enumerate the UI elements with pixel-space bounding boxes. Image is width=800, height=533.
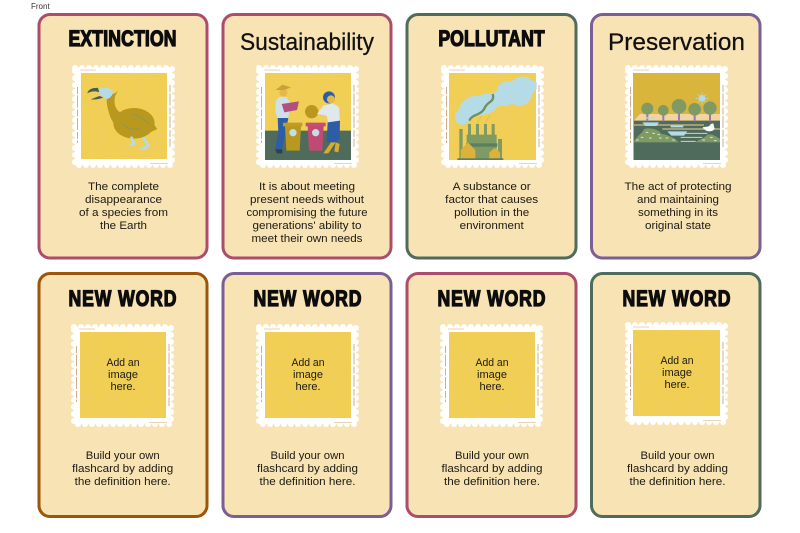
trees [641,99,717,121]
person right [305,91,340,153]
definition: flashcard by adding [442,463,542,475]
image placeholder: image [108,369,138,381]
image placeholder: Add an [476,357,508,369]
definition: Sustainability: generations' ability to [252,220,362,232]
heading: Preservation: Preservation [608,29,745,56]
label: Front: Front [31,2,50,11]
image placeholder: image [662,367,692,379]
image placeholder: here. [664,379,690,391]
image: factory stamp [444,68,541,165]
heading: Pollutant: POLLUTANT [438,27,545,52]
card: New word 2 [223,274,391,516]
definition: Sustainability: It is about meeting [259,181,355,193]
person left [275,85,299,153]
definition: flashcard by adding [627,463,728,475]
heading: New word: NEW WORD [622,287,731,312]
definition: Build your own [455,450,529,462]
definition: Pollutant: environment [460,220,525,232]
definition: Extinction: The complete [88,181,159,193]
definition [72,450,173,488]
image placeholder: here. [110,381,136,393]
image placeholder: Add an [292,357,324,369]
boats [642,117,687,136]
definition [257,450,358,488]
definition: the definition here. [444,476,540,488]
card: New word 3 [407,274,576,516]
heading: Extinction: EXTINCTION [68,27,177,52]
image placeholder [259,327,356,424]
image placeholder [74,327,171,424]
image placeholder: here. [296,381,320,393]
image placeholder: here. [480,381,504,393]
card: Preservation [592,14,760,258]
definition: Extinction [79,181,168,232]
image placeholder: Add an [660,355,694,367]
image placeholder [628,325,725,422]
definition: Pollutant: A substance or [453,181,531,193]
heading: Sustainability: Sustainability [240,29,374,56]
definition: Preservation: and maintaining [637,194,719,206]
heading: New word: NEW WORD [68,287,177,312]
definition: the definition here. [630,476,726,488]
definition: Sustainability: present needs without [250,194,365,206]
heading: New word: NEW WORD [437,287,546,312]
factory [459,124,502,159]
image: lake stamp [628,68,725,165]
sun [696,92,708,105]
definition: Preservation [624,181,732,232]
definition [627,450,728,488]
definition: Extinction: disappearance [85,194,162,206]
definition [442,450,542,488]
definition: Build your own [86,450,160,462]
definition: Extinction: of a species from [79,207,168,219]
bushes [634,128,720,142]
definition: Preservation: The act of protecting [624,181,732,193]
definition: the definition here. [260,476,356,488]
definition: Preservation: something in its [638,207,718,219]
card: Sustainability [223,14,391,258]
definition: Pollutant: pollution in the [454,207,529,219]
definition: Sustainability: compromising the future [246,207,368,219]
definition: flashcard by adding [257,463,358,475]
definition: Extinction: the Earth [100,220,147,232]
image: dodo stamp [75,68,172,165]
image placeholder: Add an [106,357,140,369]
definition: Build your own [640,450,714,462]
card: New word 4 [592,274,760,516]
definition: Sustainability [246,181,368,245]
image placeholder: image [477,369,507,381]
card: Pollutant [407,14,576,258]
bin pink [306,123,326,151]
definition: the definition here. [75,476,171,488]
image: recycling stamp [259,68,356,165]
definition: Pollutant: factor that causes [445,194,538,206]
definition: Preservation: original state [645,220,711,232]
card: New word 1 [39,274,207,516]
image placeholder [443,327,540,424]
heading: New word: NEW WORD [253,287,362,312]
bin olive [283,123,302,151]
smoke cloud [455,77,537,125]
duck [703,123,715,131]
definition: Sustainability: meet their own needs [252,233,363,245]
card: Extinction [39,14,207,258]
definition: Pollutant [445,181,538,232]
definition: Build your own [270,450,344,462]
image placeholder: image [293,369,323,381]
definition: flashcard by adding [72,463,173,475]
